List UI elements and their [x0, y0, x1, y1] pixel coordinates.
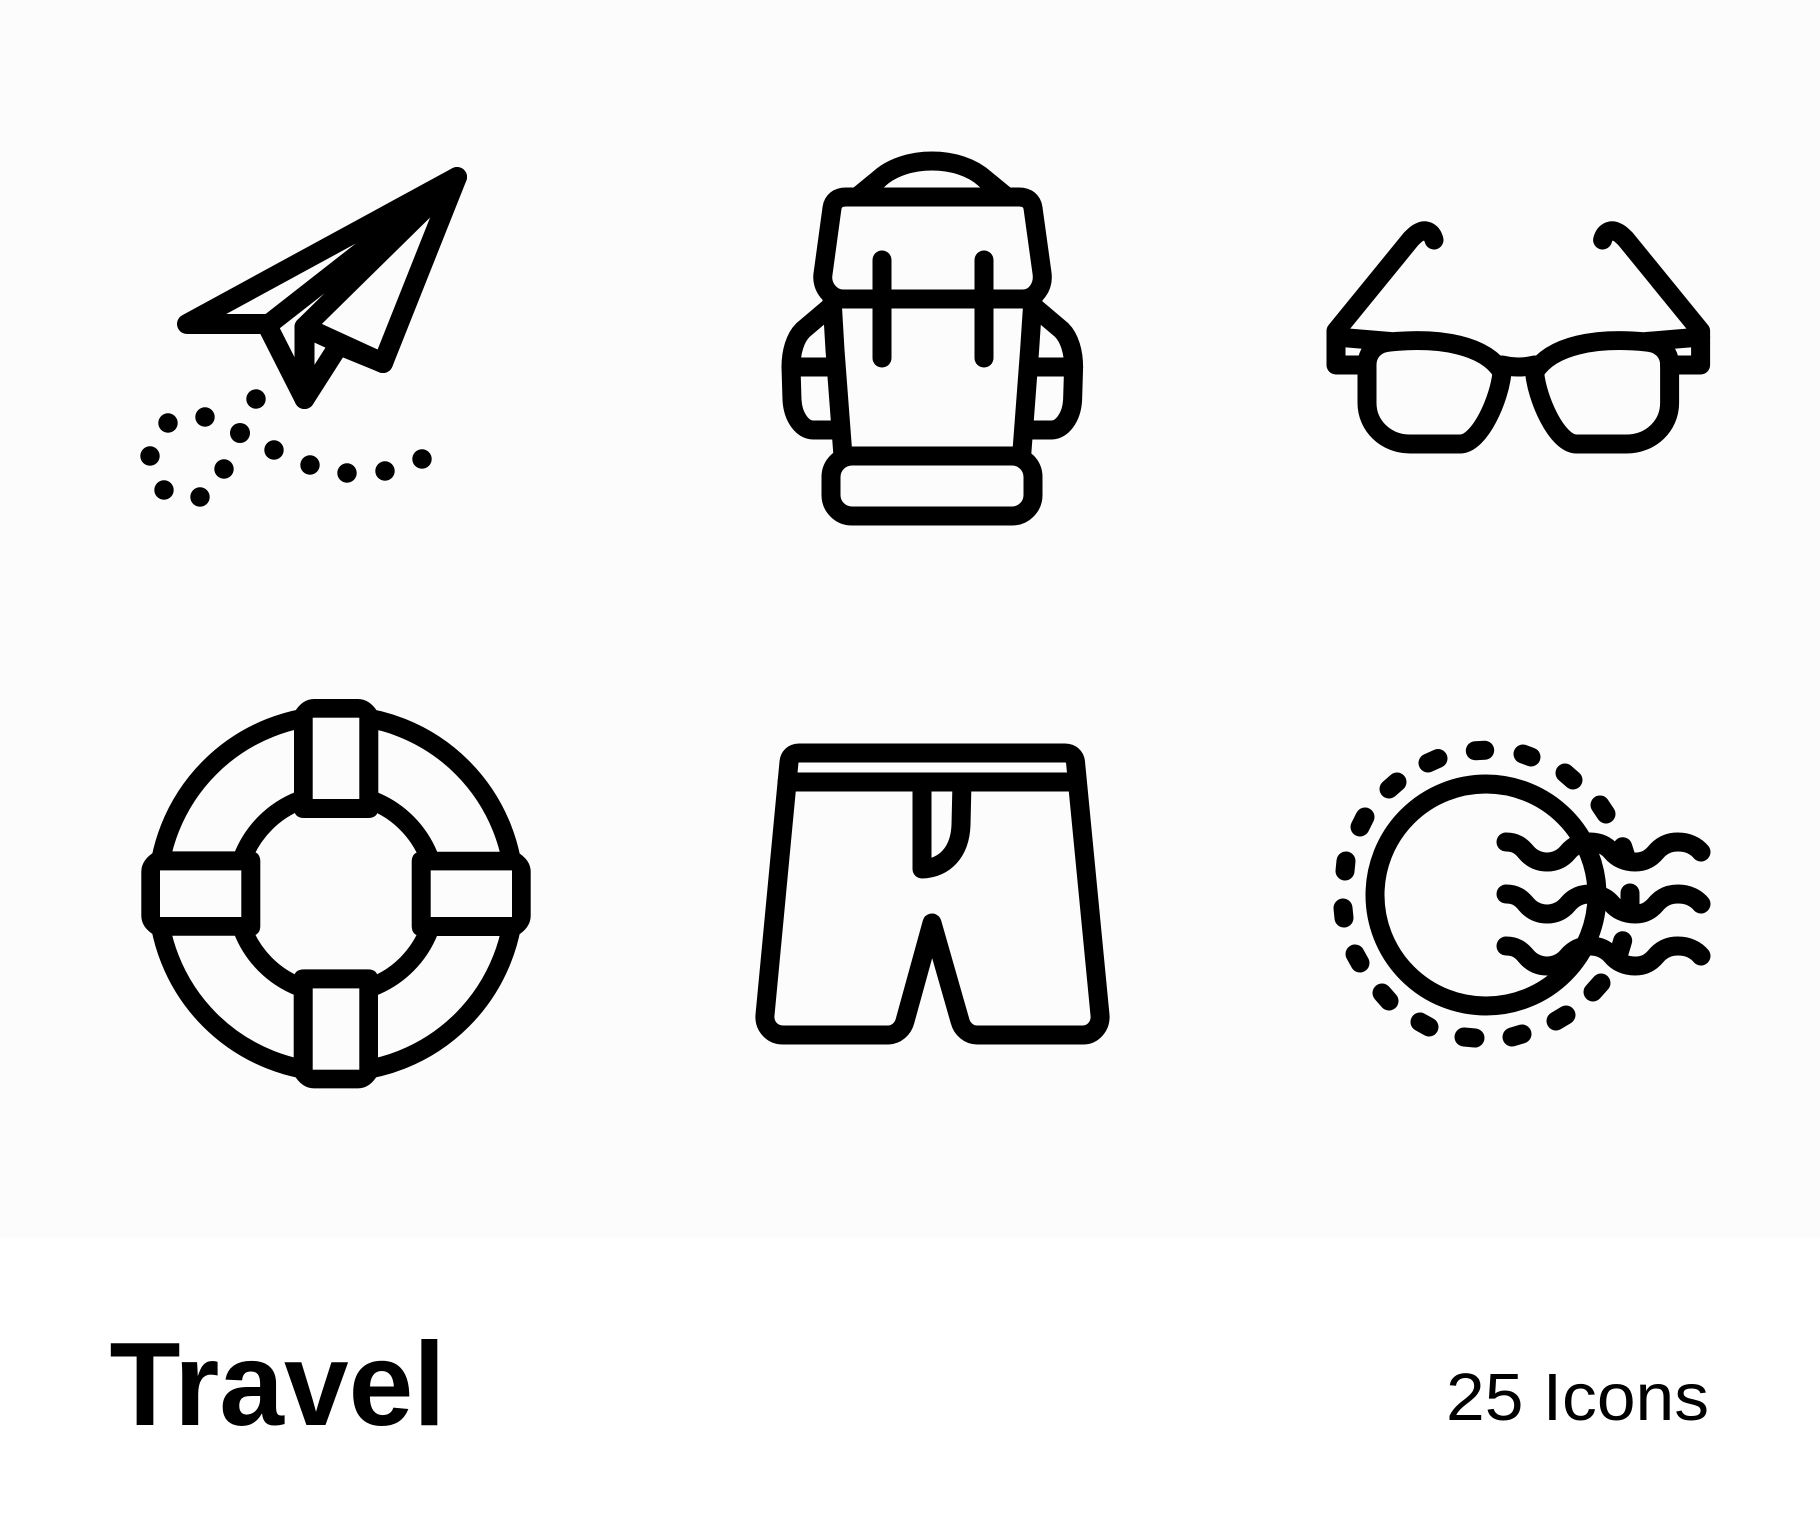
icon: glasses	[1336, 231, 1701, 444]
icon count label: 25 Icons	[1446, 1360, 1709, 1435]
icon: paper plane	[140, 177, 457, 507]
buoy band: left	[141, 851, 260, 936]
sun dashed halo	[1343, 750, 1606, 1038]
buoy band: bottom	[294, 969, 378, 1088]
buoy band: top	[294, 699, 378, 818]
title: Travel	[110, 1318, 446, 1451]
icon: hot sun with heat waves	[1343, 750, 1701, 1038]
icon: life buoy	[141, 699, 531, 1088]
icon: swim shorts	[765, 753, 1100, 1035]
plane dotted trail	[140, 389, 432, 507]
icon: backpack	[791, 161, 1074, 516]
heat wave lines	[1506, 842, 1701, 966]
buoy band: right	[412, 852, 531, 936]
